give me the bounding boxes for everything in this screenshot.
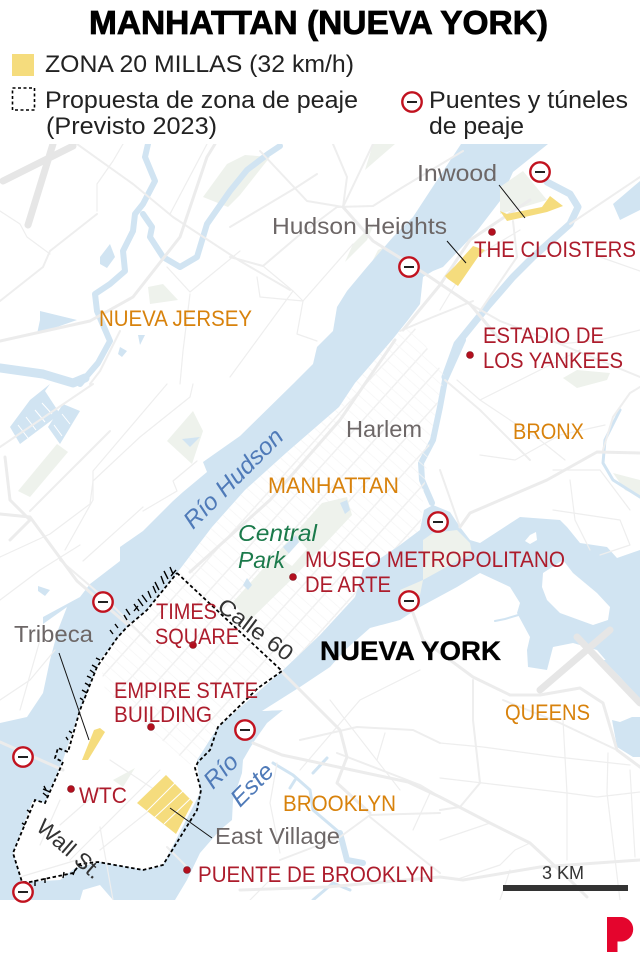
legend text: propuesta de zona de peaje — [45, 87, 358, 140]
label: Hudson Heights: Hudson Heights — [272, 213, 447, 239]
map labels — [14, 160, 636, 887]
label: Queens: QUEENS — [505, 700, 590, 725]
legend text: puentes y tuneles: de peaje — [429, 113, 524, 140]
label: Museo Metropolitano de Arte — [306, 552, 564, 592]
leader lines — [59, 185, 525, 838]
legend — [12, 51, 628, 140]
label: Bronx: BRONX — [513, 419, 584, 444]
label: Rio Este: Este — [225, 758, 280, 812]
label: WTC: WTC — [79, 783, 127, 808]
yellow zone: Hudson Heights — [445, 246, 485, 286]
parks: Manhattan — [113, 171, 547, 787]
street grid: upper Manhattan — [177, 320, 445, 671]
label: Harlem: Harlem — [346, 416, 422, 442]
toll zone boundary — [13, 567, 282, 886]
legend text: puentes y tuneles — [429, 87, 628, 140]
scale bar — [503, 862, 628, 891]
logo — [607, 917, 633, 952]
label: East Village: East Village — [215, 823, 340, 849]
yellow zone: Inwood — [500, 196, 563, 221]
label: Estadio de los Yankees: LOS YANKEES — [483, 348, 623, 373]
legend text: propuesta de zona de peaje: Propuesta de zona de peaje — [45, 87, 358, 114]
label: Nueva Jersey: NUEVA JERSEY — [99, 306, 252, 331]
label: Empire State Building — [116, 682, 258, 722]
map — [0, 144, 640, 900]
label: Central Park — [238, 524, 318, 568]
legend icon: peaje — [402, 92, 422, 112]
parks: outer — [18, 144, 640, 497]
label: Estadio de los Yankees: ESTADIO DE — [483, 323, 604, 348]
label: Inwood: Inwood — [417, 160, 497, 186]
label: Puente de Brooklyn: PUENTE DE BROOKLYN — [198, 862, 434, 887]
toll icon: Battery tunnel — [13, 882, 33, 902]
legend swatch: zona 20 millas — [12, 54, 34, 76]
label: Empire State Building: EMPIRE STATE — [114, 678, 258, 703]
label: Central Park: Central — [238, 520, 318, 546]
scale bar: 3 KM — [542, 862, 584, 883]
title: MANHATTAN (NUEVA YORK) — [89, 4, 548, 41]
label: Tribeca: Tribeca — [14, 621, 94, 647]
label: Estadio de los Yankees — [484, 328, 622, 368]
legend text: zona 20 millas: ZONA 20 MILLAS (32 km/h) — [45, 51, 354, 78]
legend text: propuesta de zona de peaje: (Previsto 2023) — [46, 113, 217, 140]
yellow zone: Tribeca — [82, 728, 105, 760]
label: Times Square — [156, 604, 238, 648]
label: Wall St.: Wall St. — [32, 814, 107, 884]
label: Rio Hudson: Río Hudson — [178, 423, 289, 534]
label: Empire State Building: BUILDING — [114, 702, 212, 727]
label: Times Square: TIMES — [156, 599, 217, 624]
label: Museo Metropolitano de Arte: DE ARTE — [305, 572, 391, 597]
label: Rio Este — [204, 756, 272, 808]
legend swatch: zona de peaje — [12, 88, 34, 110]
label: Rio Este: Río — [198, 748, 244, 794]
label: Nueva York: NUEVA YORK — [320, 636, 502, 666]
yellow zone: East Village — [137, 775, 193, 834]
legend text: puentes y tuneles: Puentes y túneles — [429, 87, 628, 114]
toll icons — [13, 162, 550, 767]
water: Hudson, bay and East River — [0, 144, 640, 900]
label: Times Square: SQUARE — [155, 624, 239, 649]
label: Calle 60: Calle 60 — [213, 593, 298, 666]
roads — [0, 144, 640, 900]
label: Brooklyn: BROOKLYN — [283, 791, 396, 816]
street grid: Manhattan — [100, 573, 282, 765]
place dots — [68, 228, 496, 874]
label: Manhattan: MANHATTAN — [268, 473, 399, 498]
label: Museo Metropolitano de Arte: MUSEO METROPOLITANO — [305, 547, 565, 572]
land islands — [262, 532, 610, 711]
label: Central Park: Park — [238, 547, 286, 573]
